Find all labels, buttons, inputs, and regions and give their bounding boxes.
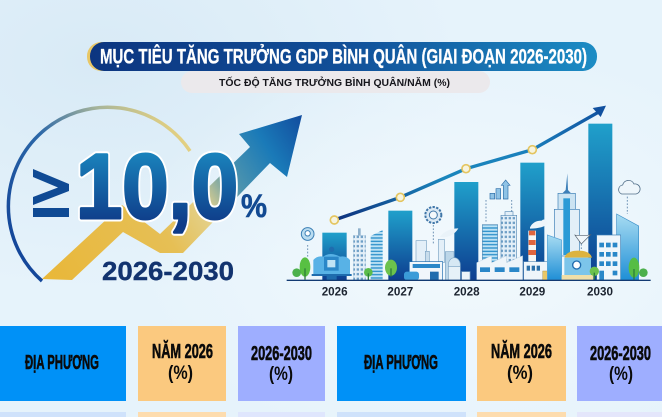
icons: 2026 city block	[292, 228, 383, 280]
greater-or-equal sign	[33, 169, 69, 217]
headline number: 10,0	[76, 136, 238, 238]
icons: 2028 factory and towers	[477, 180, 523, 280]
header: region column left: ĐỊA PHƯƠNG	[25, 352, 99, 374]
headline target graphic	[8, 107, 302, 286]
city skyline bar chart	[287, 106, 651, 298]
header: 2026-2030 column left: (%)	[269, 364, 293, 385]
icons: 2029 chimney and skyscraper	[524, 173, 579, 280]
icons: 2027 industrial plant	[385, 207, 470, 280]
subtitle pill: TỐC ĐỘ TĂNG TRƯỞNG BÌNH QUÂN/NĂM (%)	[219, 75, 450, 89]
table header	[0, 326, 662, 401]
header: 2026 column left: (%)	[168, 363, 193, 384]
year labels	[322, 285, 613, 298]
line markers	[330, 146, 536, 224]
year labels: 2026	[322, 285, 348, 298]
arc around target	[8, 107, 190, 281]
baseline axis	[287, 280, 651, 281]
headline number: 10,0	[76, 136, 238, 238]
header: 2026-2030 column left: 2026-2030	[251, 343, 312, 365]
header: 2026 column right: (%)	[507, 363, 533, 384]
header: 2026-2030 column right: (%)	[609, 364, 633, 385]
header: 2026 column left: NĂM 2026	[152, 340, 213, 363]
header: 2026 column left	[138, 326, 226, 401]
header: region column right	[337, 326, 466, 401]
next table row (cropped)	[0, 412, 662, 417]
growth arrow	[42, 115, 302, 280]
icons: 2030 dome, office and glass tower	[562, 180, 648, 280]
growth line	[334, 112, 599, 220]
year labels: 2029	[519, 285, 546, 298]
year labels: 2027	[387, 285, 413, 298]
header: region column left	[0, 326, 126, 401]
growth line arrow head	[593, 106, 606, 117]
subtitle pill	[181, 71, 490, 93]
header: 2026 column right: NĂM 2026	[491, 340, 552, 363]
header: region column right: ĐỊA PHƯƠNG	[364, 352, 438, 374]
header: 2026-2030 column left	[238, 326, 325, 401]
bars	[322, 124, 612, 280]
period label: 2026-2030	[102, 258, 234, 286]
year labels: 2030	[587, 285, 613, 298]
year labels: 2028	[454, 285, 480, 298]
percent sign: %	[241, 188, 267, 224]
header: 2026-2030 column right	[577, 326, 662, 401]
header: 2026 column right	[477, 326, 566, 401]
